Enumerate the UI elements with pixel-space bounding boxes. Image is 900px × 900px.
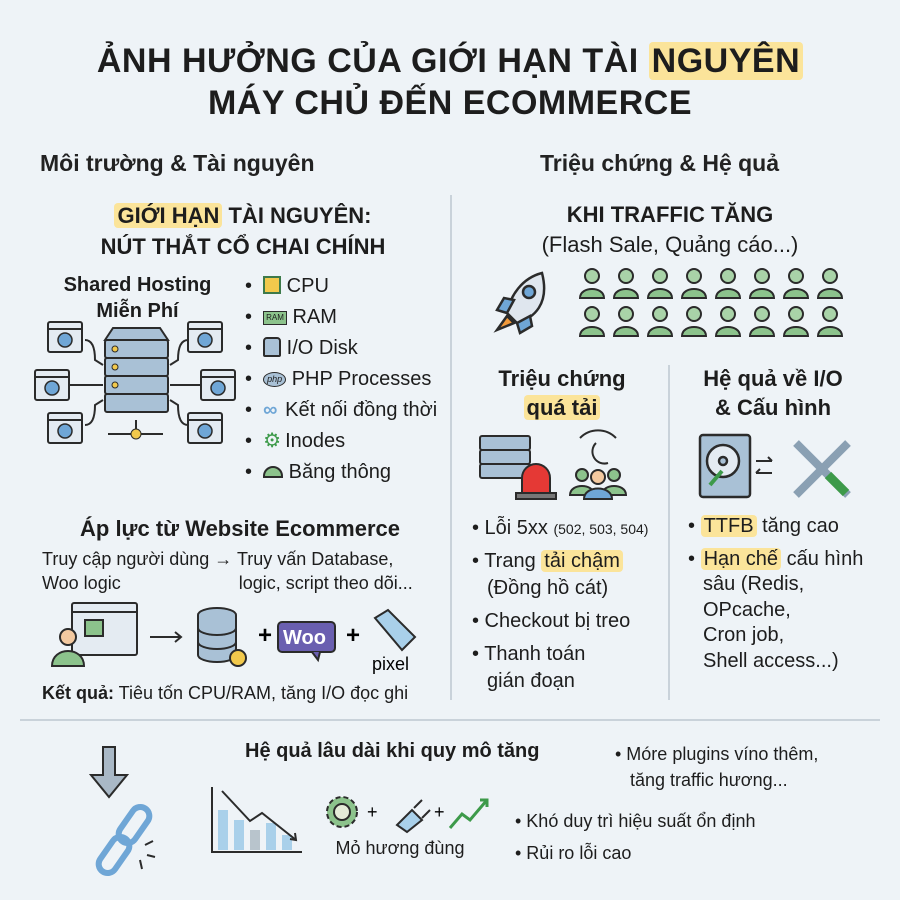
icon: disk and tools [698, 434, 851, 498]
list: symptoms: gián đoạn [487, 670, 575, 692]
divider vertical [450, 195, 452, 700]
list: symptoms: • Thanh toán [472, 643, 585, 665]
list: resources: RAM [266, 313, 284, 322]
shared hosting label [64, 274, 211, 322]
list: resources: • CPU [245, 275, 329, 297]
subheading: bottleneck: NÚT THẮT CỔ CHAI CHÍNH [101, 234, 385, 259]
icons: ecommerce flow: pixel [372, 654, 409, 674]
list: long-term bullets: • Móre plugins víno thêm, [615, 744, 818, 764]
subheading: bottleneck: GIỚI HẠN TÀI NGUYÊN: [117, 203, 372, 228]
list: resources: • Băng thông [245, 461, 391, 483]
list: resources: • RAM [245, 306, 337, 328]
list: IO consequences: sâu (Redis, [703, 573, 804, 595]
icon: arrow down and broken chain [89, 746, 156, 876]
subheading: traffic: KHI TRAFFIC TĂNG [567, 202, 773, 227]
text: • Rủi ro lỗi cao [515, 843, 631, 863]
diagram: shared hosting server [34, 321, 236, 444]
icons: ecommerce flow: + [258, 622, 272, 649]
list: resources: ⚙︎ [263, 430, 281, 452]
list: symptoms: • Checkout bị treo [472, 610, 630, 632]
list: resources: • I/O Disk [245, 337, 358, 359]
icons: ecommerce flow [51, 602, 416, 674]
heading: long-term: Hệ quả lâu dài khi quy mô tăng [245, 740, 539, 762]
list: IO consequences [688, 515, 863, 672]
list: symptoms: (Đồng hồ cát) [487, 577, 608, 599]
list: resources: • Inodes [245, 430, 345, 452]
list: IO consequences: Shell access...) [703, 650, 839, 672]
shared hosting label: Shared Hosting [64, 274, 211, 296]
list: resources: ∞ [263, 399, 277, 421]
list: IO consequences: Cron job, [703, 624, 784, 646]
list: symptoms: • Lỗi 5xx (502, 503, 504) [472, 517, 648, 539]
subheading: traffic [542, 202, 798, 257]
list: long-term bullets: tăng traffic hương... [630, 770, 788, 790]
icons: gear plug growth: + [367, 802, 378, 822]
title: ẢNH HƯỞNG CỦA GIỚI HẠN TÀI NGUYÊN [97, 42, 800, 80]
list: resources: • PHP Processes [245, 368, 431, 390]
heading: left section: Môi trường & Tài nguyên [40, 150, 314, 176]
list: long-term bullets [615, 744, 818, 790]
title: MÁY CHỦ ĐẾN ECOMMERCE [208, 84, 692, 122]
list: resources: php [267, 374, 282, 384]
list: IO consequences: • Hạn chế cấu hình [688, 548, 863, 570]
heading: ecommerce pressure: Áp lực từ Website Ecommerce [80, 516, 400, 541]
list: IO consequences: • TTFB tăng cao [688, 515, 839, 537]
shared hosting label: Miễn Phí [96, 300, 179, 322]
heading: IO consequences [703, 366, 843, 420]
icon: server alarm and users [479, 429, 627, 500]
subheading: traffic: (Flash Sale, Quảng cáo...) [542, 232, 798, 257]
text: flow: Truy cập người dùng → Truy vấn Database, [42, 549, 393, 569]
heading: IO consequences: Hệ quả về I/O [703, 366, 843, 391]
heading: right section: Triệu chứng & Hệ quả [540, 150, 779, 176]
list: symptoms [472, 516, 648, 692]
list: symptoms: • Trang tải chậm [472, 550, 620, 572]
text: • Khó duy trì hiệu suất ổn định [515, 811, 755, 831]
icons: gear plug growth [326, 796, 488, 834]
icons: ecommerce flow: + [346, 622, 360, 649]
icons: gear plug growth: + [434, 802, 445, 822]
heading: IO consequences: & Cấu hình [715, 395, 831, 420]
text: flow: Woo logic logic, script theo dõi... [42, 573, 413, 593]
heading: overload symptoms: quá tải [527, 395, 597, 420]
icon: rocket [494, 272, 546, 335]
heading: overload symptoms [498, 366, 626, 420]
icon: people grid [579, 268, 843, 337]
list: resources [245, 275, 437, 483]
text: flow [42, 549, 413, 593]
title [97, 41, 803, 122]
heading: overload symptoms: Triệu chứng [498, 366, 626, 391]
chart: declining [211, 787, 302, 853]
subheading: bottleneck [101, 203, 385, 259]
icons: ecommerce flow: Woo [283, 627, 326, 649]
list: IO consequences: OPcache, [703, 598, 791, 620]
list: resources: • Kết nối đồng thời [245, 399, 437, 421]
text: caption: Mỏ hương đùng [336, 838, 464, 858]
text: result: Kết quả: Tiêu tốn CPU/RAM, tăng I/O đọc ghi [42, 683, 408, 703]
